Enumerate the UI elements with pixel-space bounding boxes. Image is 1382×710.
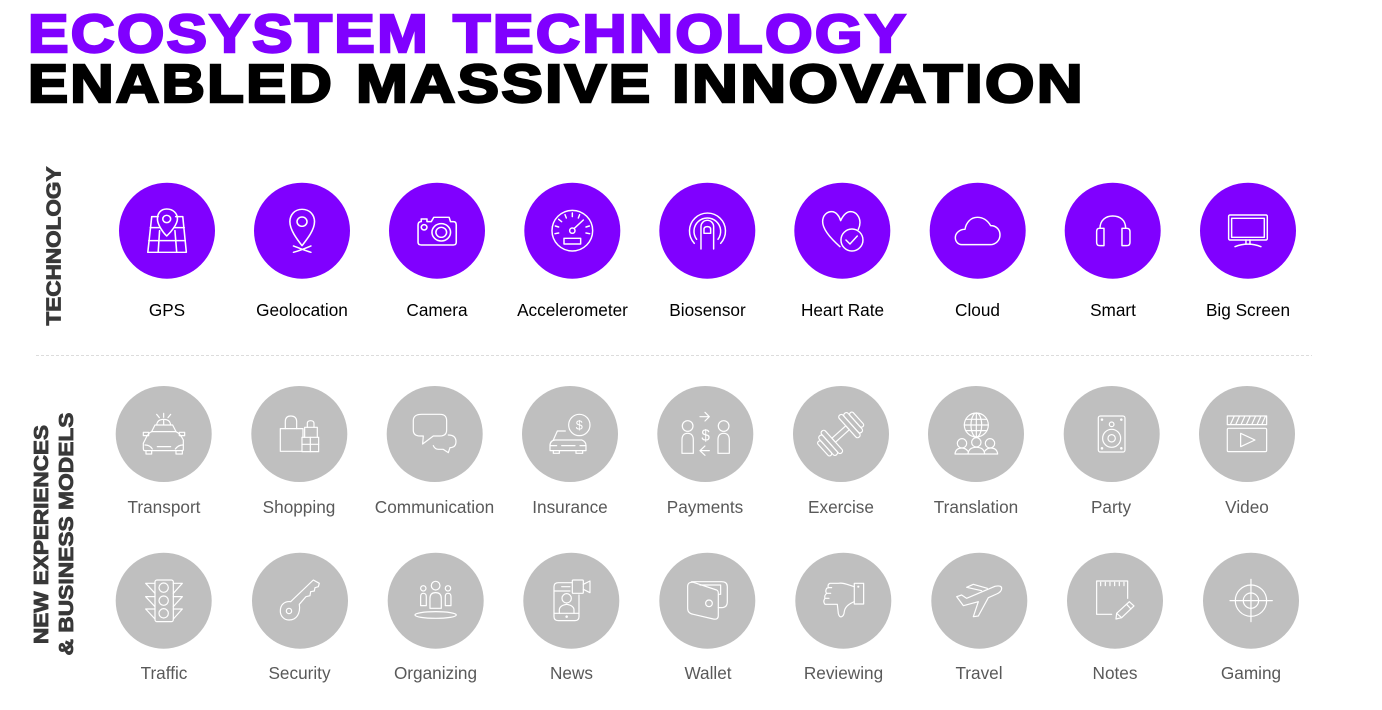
- item: Payments: [657, 386, 753, 517]
- icon: airplane: [957, 584, 1002, 617]
- icon: police car: [143, 413, 185, 454]
- item: Notes: [1067, 553, 1163, 683]
- label: Security: Security: [268, 663, 331, 683]
- icon: clapperboard: [1227, 416, 1267, 452]
- label: Payments: Payments: [667, 497, 743, 517]
- label: Traffic: Traffic: [141, 663, 188, 683]
- icon: key: [280, 580, 319, 620]
- item: Heart Rate: [794, 183, 890, 320]
- label: Exercise: Exercise: [808, 497, 874, 517]
- label: Wallet: Wallet: [684, 663, 732, 683]
- item: Exercise: [793, 386, 889, 517]
- item: Party: [1064, 386, 1160, 517]
- label: Reviewing: Reviewing: [804, 663, 883, 683]
- item: Travel: [931, 553, 1027, 683]
- label: Translation: Translation: [934, 497, 1018, 517]
- icon: speaker: [1098, 416, 1125, 452]
- item: Video: [1199, 386, 1295, 517]
- icon: globe and people: [955, 413, 998, 454]
- item: GPS: [119, 183, 215, 320]
- icon: fingerprint touch: [689, 213, 725, 249]
- label: Video: Video: [1225, 497, 1269, 517]
- icon: camera: [418, 217, 456, 245]
- item: Translation: [928, 386, 1024, 517]
- item: Gaming: [1203, 553, 1299, 683]
- item: Traffic: [116, 553, 212, 683]
- item: Transport: [116, 386, 212, 517]
- label: Geolocation: Geolocation: [256, 300, 348, 320]
- title: INNOVATION: [672, 54, 1085, 114]
- icon: phone video call: [554, 580, 590, 621]
- item: Reviewing: [795, 553, 891, 683]
- icon: monitor: [1229, 215, 1267, 247]
- heading: new experiences and business models: NEW EXPERIENCES: [31, 425, 53, 644]
- label: Gaming: Gaming: [1221, 663, 1281, 683]
- item: Camera: [389, 183, 485, 320]
- item: Shopping: [251, 386, 347, 517]
- label: News: News: [550, 663, 593, 683]
- icon: location pin: [290, 209, 315, 252]
- label: Biosensor: Biosensor: [669, 300, 746, 320]
- item: Smart: [1065, 183, 1161, 320]
- item: News: [523, 553, 619, 683]
- icon: shopping bags: [280, 416, 319, 452]
- title: ENABLED: [28, 54, 334, 114]
- icon: headphones: [1097, 216, 1130, 246]
- title: TECHNOLOGY: [453, 4, 908, 64]
- label: Notes: Notes: [1093, 663, 1137, 683]
- icon: car with dollar: $: [576, 419, 583, 433]
- label: Communication: Communication: [375, 497, 494, 517]
- icon: crosshair: [1230, 579, 1272, 622]
- panel: new experiences and business models: [31, 386, 1299, 683]
- title: MASSIVE: [356, 54, 652, 114]
- label: Shopping: Shopping: [263, 497, 335, 517]
- item: Accelerometer: [517, 183, 628, 320]
- title: [28, 4, 1085, 114]
- label: Party: Party: [1091, 497, 1131, 517]
- heading: new experiences and business models: [31, 412, 78, 656]
- label: Organizing: Organizing: [394, 663, 477, 683]
- label: Big Screen: Big Screen: [1206, 300, 1290, 320]
- item: Communication: [375, 386, 494, 517]
- icon: cloud: [955, 217, 1000, 245]
- label: Insurance: Insurance: [532, 497, 608, 517]
- item: Big Screen: [1200, 183, 1296, 320]
- label: Travel: Travel: [955, 663, 1003, 683]
- icon: traffic light: [146, 580, 182, 622]
- item: Wallet: [659, 553, 755, 683]
- label: Accelerometer: Accelerometer: [517, 300, 628, 320]
- title: ECOSYSTEM: [28, 4, 430, 64]
- icon: map with pin: [148, 209, 186, 252]
- label: Heart Rate: Heart Rate: [801, 300, 884, 320]
- icon: heart with check: [823, 212, 863, 251]
- heading: new experiences and business models: & BUSINESS MODELS: [56, 412, 78, 656]
- icon: notepad and pencil: [1097, 581, 1134, 619]
- item: Security: [252, 553, 348, 683]
- icon: wallet: [688, 582, 727, 619]
- label: Camera: Camera: [406, 300, 468, 320]
- heading: technology: TECHNOLOGY: [43, 166, 65, 326]
- icon: dumbbell: [813, 407, 868, 461]
- item: Biosensor: [659, 183, 755, 320]
- icon: thumbs down: [824, 583, 864, 617]
- panel: technology: [43, 166, 1296, 326]
- icon: group on platform: [415, 581, 456, 618]
- label: Smart: Smart: [1090, 300, 1136, 320]
- icon: speech bubbles: [413, 414, 456, 453]
- item: Organizing: [388, 553, 484, 683]
- item: Insurance: [522, 386, 618, 517]
- item: Cloud: [930, 183, 1026, 320]
- label: Transport: Transport: [128, 497, 201, 517]
- icon: people exchanging money: $: [701, 427, 710, 444]
- item: Geolocation: [254, 183, 350, 320]
- icon: speedometer: [552, 210, 593, 251]
- label: Cloud: Cloud: [955, 300, 1000, 320]
- label: GPS: GPS: [149, 300, 185, 320]
